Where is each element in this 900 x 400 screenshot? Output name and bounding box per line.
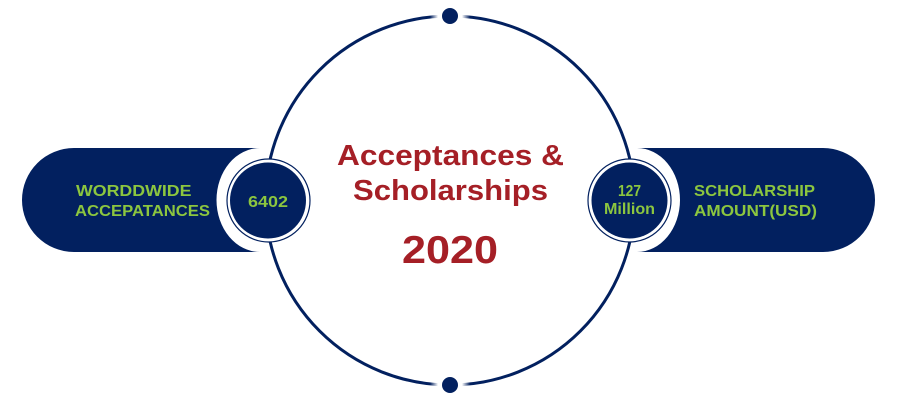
icon: top dot (442, 8, 458, 24)
badge: 6402 acceptances: 6402 (248, 194, 288, 211)
label: worldwide acceptances: WORDDWIDE (76, 183, 192, 200)
label: worldwide acceptances (75, 183, 210, 220)
panel: worldwide acceptances pill (22, 148, 260, 252)
badge: 127 million: 127 (618, 183, 641, 200)
badge: 127 million (588, 159, 671, 242)
icon: bottom dot (442, 377, 458, 393)
title: Scholarships (353, 175, 548, 207)
label: scholarship amount (694, 183, 817, 220)
circle gap fades beside the dots (430, 8, 470, 393)
title: Acceptances & (337, 140, 564, 172)
year: 2020 (402, 229, 498, 272)
title (337, 140, 564, 207)
label: scholarship amount: SCHOLARSHIP (694, 183, 815, 200)
label: worldwide acceptances: ACCEPATANCES (75, 203, 210, 220)
badge: 127 million: Million (604, 201, 655, 218)
central circle outline (266, 16, 634, 385)
label: scholarship amount: AMOUNT(USD) (694, 203, 817, 220)
badge: 6402 acceptances (227, 159, 310, 242)
panel: scholarship amount pill (637, 148, 875, 252)
